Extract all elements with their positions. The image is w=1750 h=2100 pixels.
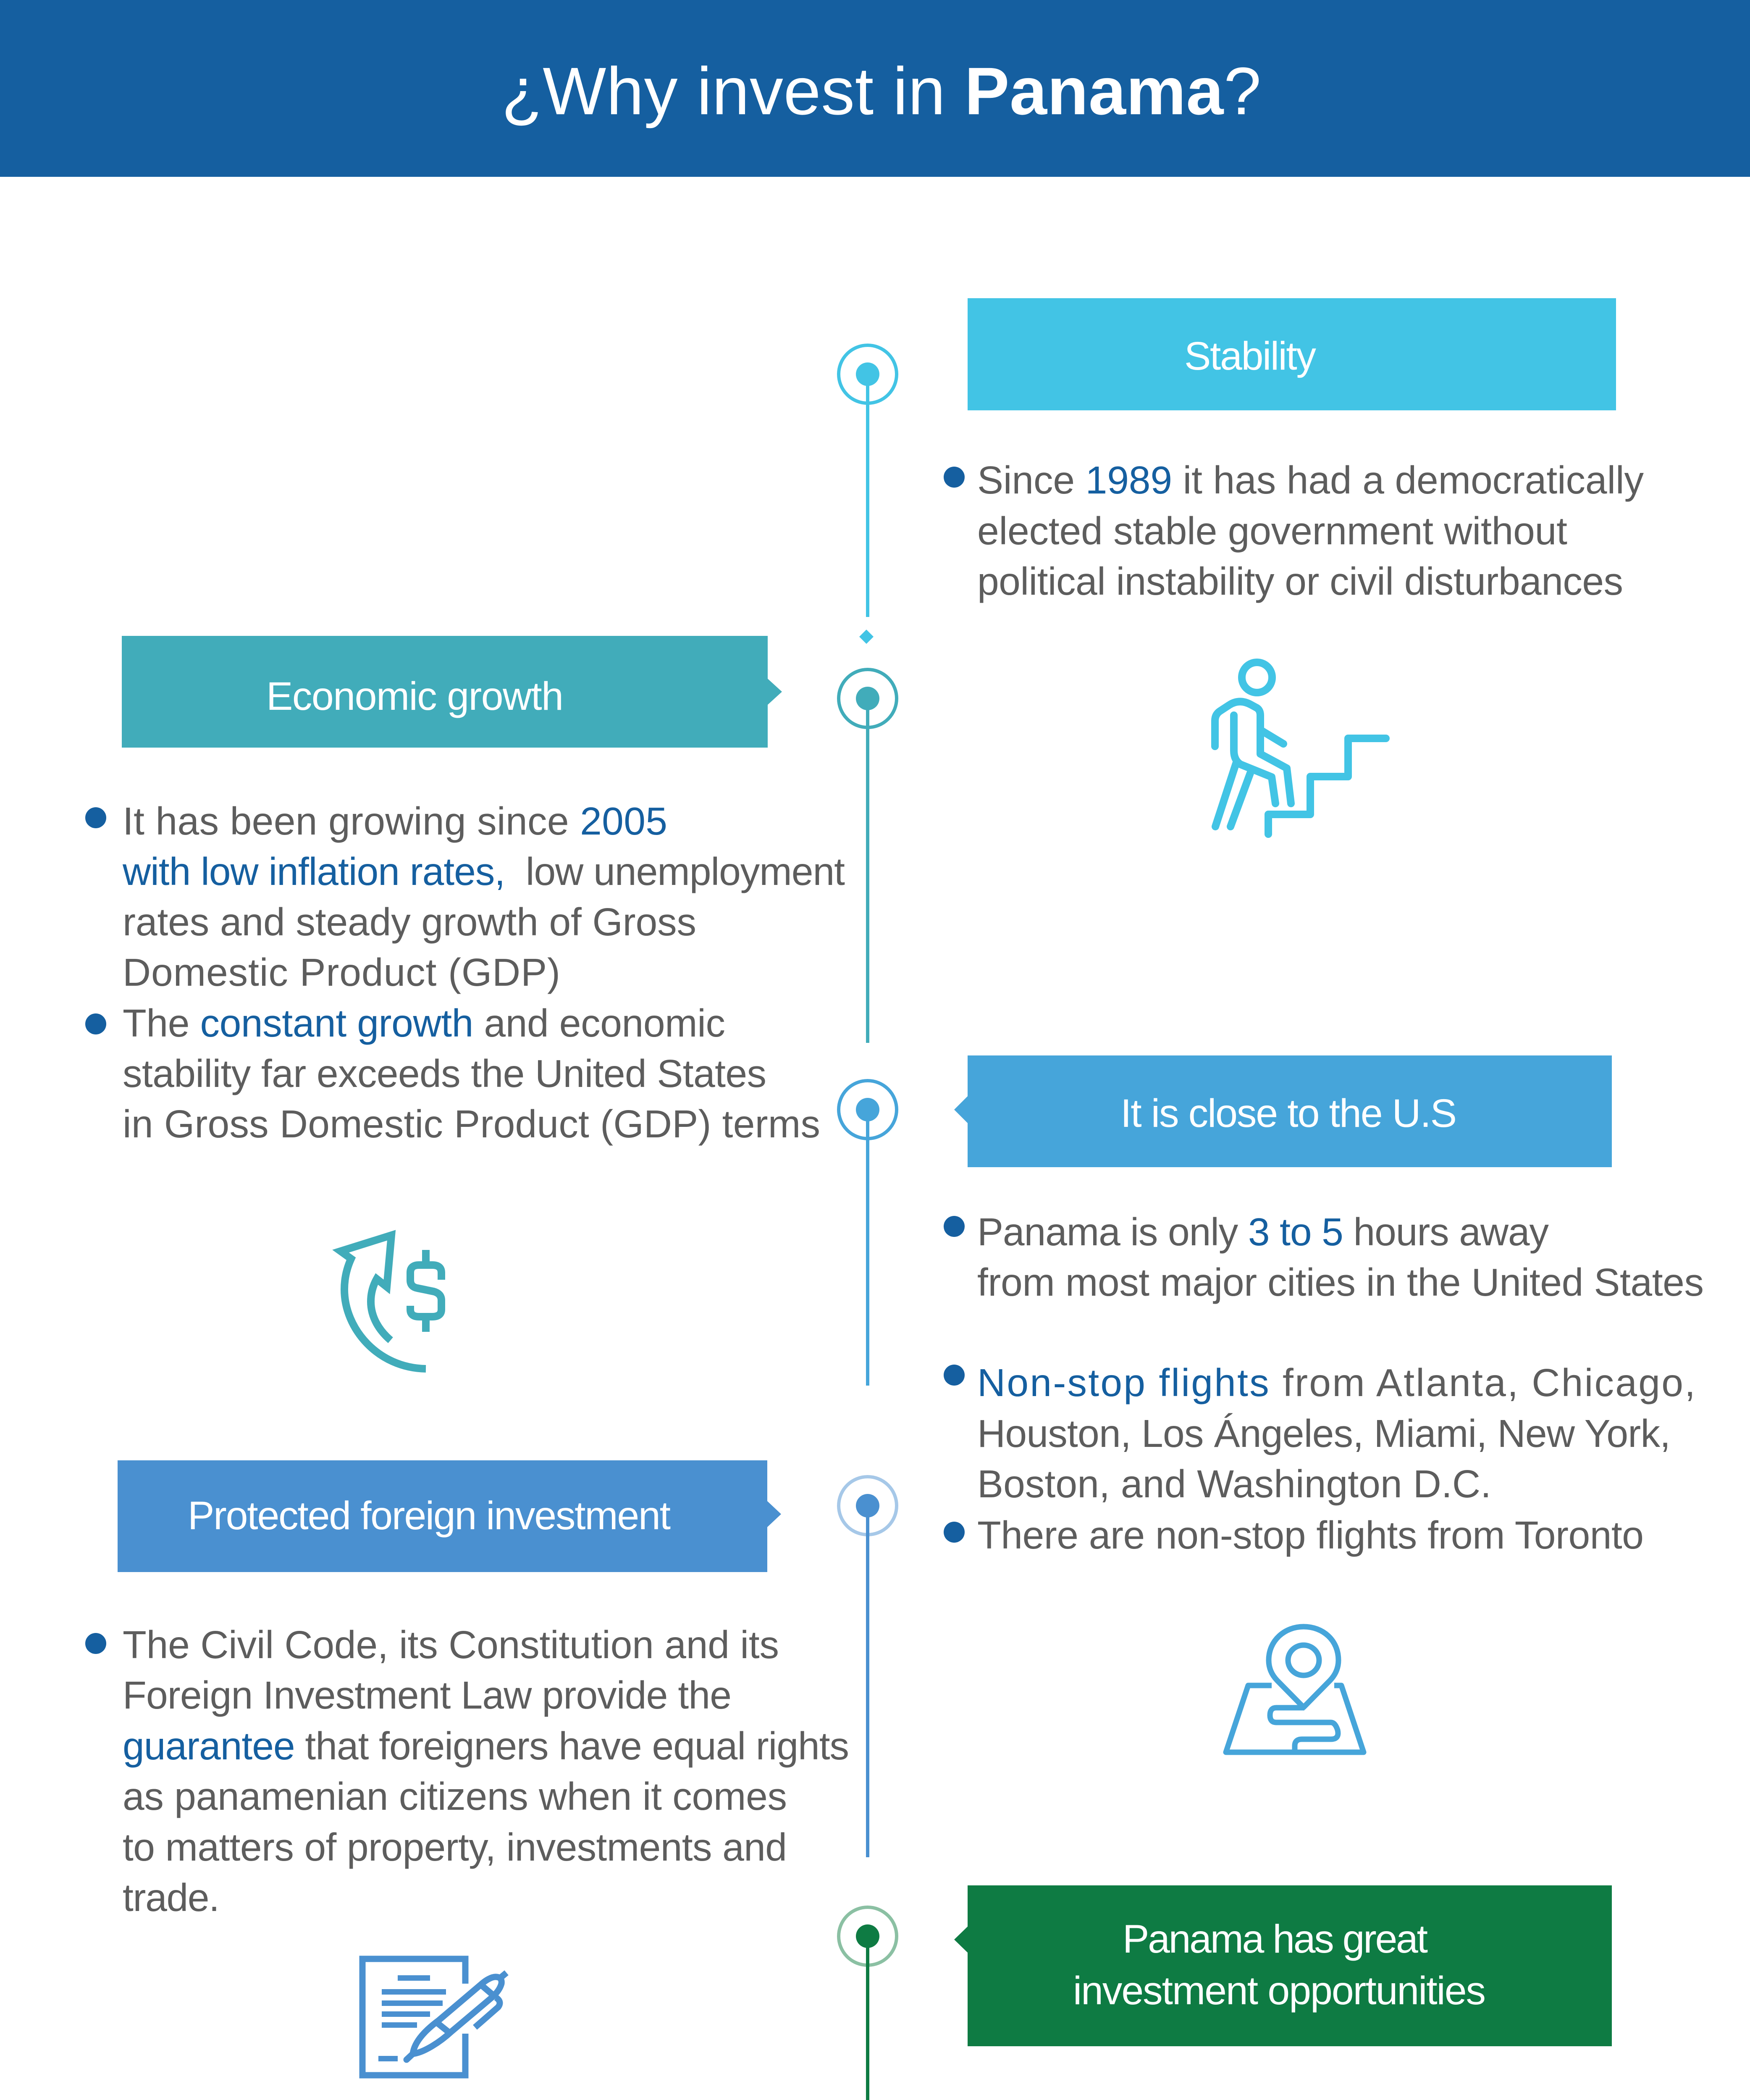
text: protected foreign investment: to matters of property, investments and bbox=[123, 1825, 787, 1869]
text: close to the US bbox=[944, 1210, 1704, 1557]
text: stability: elected stable government without bbox=[977, 509, 1567, 553]
timeline marker: protected foreign investment bbox=[839, 1477, 897, 1857]
text: protected foreign investment: as panamenian citizens when it comes bbox=[123, 1774, 787, 1818]
heading: stability: Stability bbox=[1184, 334, 1316, 378]
heading: investment opportunities: Panama has great bbox=[1123, 1917, 1428, 1961]
heading: protected foreign investment bbox=[118, 1460, 781, 1572]
heading: close to the US bbox=[954, 1055, 1612, 1167]
icon: growth arrow with dollar bbox=[341, 1235, 441, 1369]
heading: economic growth bbox=[122, 636, 782, 748]
text: economic growth: rates and steady growth of Gross bbox=[123, 900, 696, 944]
icon: person climbing stairs bbox=[1215, 662, 1386, 834]
heading: protected foreign investment: Protected foreign investment bbox=[188, 1494, 671, 1538]
timeline marker: economic growth bbox=[839, 669, 897, 1043]
text: protected foreign investment: The Civil Code, its Constitution and its bbox=[123, 1623, 779, 1667]
title banner bbox=[0, 0, 1750, 177]
text: close to the US: Boston, and Washington D.C. bbox=[977, 1462, 1491, 1506]
panel: protected foreign investment bbox=[85, 1460, 897, 2075]
panel: economic growth bbox=[85, 636, 897, 1369]
title: ¿Why invest in Panama? bbox=[501, 53, 1261, 129]
heading: stability bbox=[968, 298, 1616, 410]
text: close to the US: Panama is only 3 to 5 hours away bbox=[977, 1210, 1549, 1254]
text: close to the US: There are non-stop flights from Toronto bbox=[977, 1513, 1644, 1557]
text: economic growth: in Gross Domestic Product (GDP) terms bbox=[123, 1102, 820, 1146]
text: economic growth bbox=[85, 799, 845, 1146]
timeline marker: investment opportunities bbox=[839, 1907, 897, 2100]
text: stability bbox=[944, 458, 1644, 603]
timeline marker: close to the US bbox=[839, 1081, 897, 1386]
text: protected foreign investment: guarantee that foreigners have equal rights bbox=[123, 1724, 849, 1768]
text: economic growth: The constant growth and economic bbox=[123, 1001, 725, 1045]
timeline marker: stability bbox=[839, 345, 897, 644]
panel: stability bbox=[839, 298, 1644, 834]
text: economic growth: with low inflation rates, low unemployment bbox=[122, 850, 845, 893]
heading: close to the US: It is close to the U.S bbox=[1120, 1091, 1457, 1136]
icon: document and pen bbox=[362, 1959, 506, 2075]
heading: investment opportunities bbox=[954, 1885, 1612, 2046]
text: protected foreign investment: Foreign Investment Law provide the bbox=[123, 1673, 732, 1717]
text: protected foreign investment: trade. bbox=[123, 1876, 220, 1919]
text: close to the US: Houston, Los Ángeles, Miami, New York, bbox=[977, 1412, 1671, 1455]
text: economic growth: Domestic Product (GDP) bbox=[123, 950, 560, 994]
panel: investment opportunities bbox=[85, 1885, 1714, 2100]
panel: close to the US bbox=[839, 1055, 1704, 1752]
text: stability: political instability or civil disturbances bbox=[977, 559, 1623, 603]
heading: investment opportunities: investment opportunities bbox=[1073, 1969, 1486, 2013]
text: close to the US: from most major cities in the United States bbox=[977, 1260, 1704, 1304]
text: stability: Since 1989 it has had a democratically bbox=[977, 458, 1644, 502]
text: protected foreign investment bbox=[85, 1623, 849, 1919]
heading: economic growth: Economic growth bbox=[266, 674, 564, 719]
text: economic growth: It has been growing since 2005 bbox=[123, 799, 667, 843]
text: economic growth: stability far exceeds the United States bbox=[123, 1052, 766, 1095]
icon: map with location pin bbox=[1226, 1627, 1364, 1752]
text: close to the US: Non-stop flights from Atlanta, Chicago, bbox=[977, 1361, 1695, 1404]
